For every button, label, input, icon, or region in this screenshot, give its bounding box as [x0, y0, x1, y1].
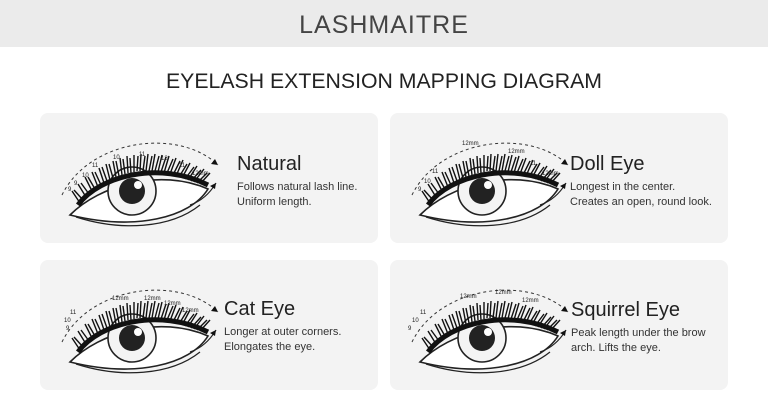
icon: doll eye map: 11: [432, 169, 439, 175]
icon: cat eye map: 12mm: [182, 308, 199, 314]
icon: natural eye map: 10: [113, 155, 120, 161]
header bar: [0, 0, 768, 47]
icon: squirrel eye map: 12mm: [495, 290, 512, 296]
icon: doll eye map: 10: [424, 179, 431, 185]
icon: cat eye map: 10: [64, 318, 71, 324]
icon: natural eye map: 12mm: [192, 171, 209, 177]
text: description: Peak length under the brow: [571, 327, 706, 339]
text: description: Elongates the eye.: [224, 341, 315, 353]
text: description: Longest in the center.: [570, 181, 675, 193]
icon: cat eye map: 12mm: [112, 296, 129, 302]
icon: squirrel eye map: 9: [408, 326, 412, 332]
icon: squirrel eye map: 10: [412, 318, 419, 324]
icon: natural eye map: 9: [74, 181, 78, 187]
icon: natural eye map: 10: [82, 173, 89, 179]
icon: doll eye map: 11: [530, 161, 537, 167]
icon: natural eye map: 12: [161, 156, 168, 162]
icon: cat eye map: 12mm: [164, 301, 181, 307]
panel: squirrel eye: [390, 260, 728, 390]
heading: Cat Eye: Cat Eye: [224, 298, 295, 320]
icon: cat eye map: 12mm: [144, 296, 161, 302]
panel: cat eye: [40, 260, 378, 390]
icon: cat eye map: 11: [70, 310, 77, 316]
brand name: LASHMAITRE: [299, 11, 469, 39]
icon: squirrel eye map: 12mm: [522, 298, 539, 304]
icon: natural eye map: 11: [139, 152, 146, 158]
text: description: Longer at outer corners.: [224, 326, 341, 338]
icon: squirrel eye map: [408, 290, 568, 373]
heading: Squirrel Eye: Squirrel Eye: [571, 299, 680, 321]
icon: natural eye map: 11: [179, 163, 186, 169]
panel: doll eye: [390, 113, 728, 243]
text: description: Follows natural lash line.: [237, 181, 357, 193]
icon: natural eye map: 9: [68, 187, 72, 193]
heading: Natural: Natural: [237, 153, 301, 175]
icon: squirrel eye map: 12mm: [460, 294, 477, 300]
icon: cat eye map: 9: [66, 326, 70, 332]
icon: squirrel eye map: 11: [420, 310, 427, 316]
icon: doll eye map: 12mm: [462, 141, 479, 147]
main title: EYELASH EXTENSION MAPPING DIAGRAM: [166, 70, 602, 93]
panel: natural: [40, 113, 378, 243]
icon: doll eye map: [412, 141, 568, 226]
text: description: Uniform length.: [237, 196, 312, 208]
text: description: arch. Lifts the eye.: [571, 342, 661, 354]
icon: doll eye map: 9: [418, 187, 422, 193]
icon: natural eye map: 11: [92, 163, 99, 169]
icon: natural eye map: [62, 143, 218, 226]
icon: doll eye map: 12mm: [542, 171, 559, 177]
text: description: Creates an open, round look.: [570, 196, 712, 208]
icon: doll eye map: 12mm: [508, 149, 525, 155]
heading: Doll Eye: Doll Eye: [570, 153, 644, 175]
icon: cat eye map: [62, 290, 218, 373]
